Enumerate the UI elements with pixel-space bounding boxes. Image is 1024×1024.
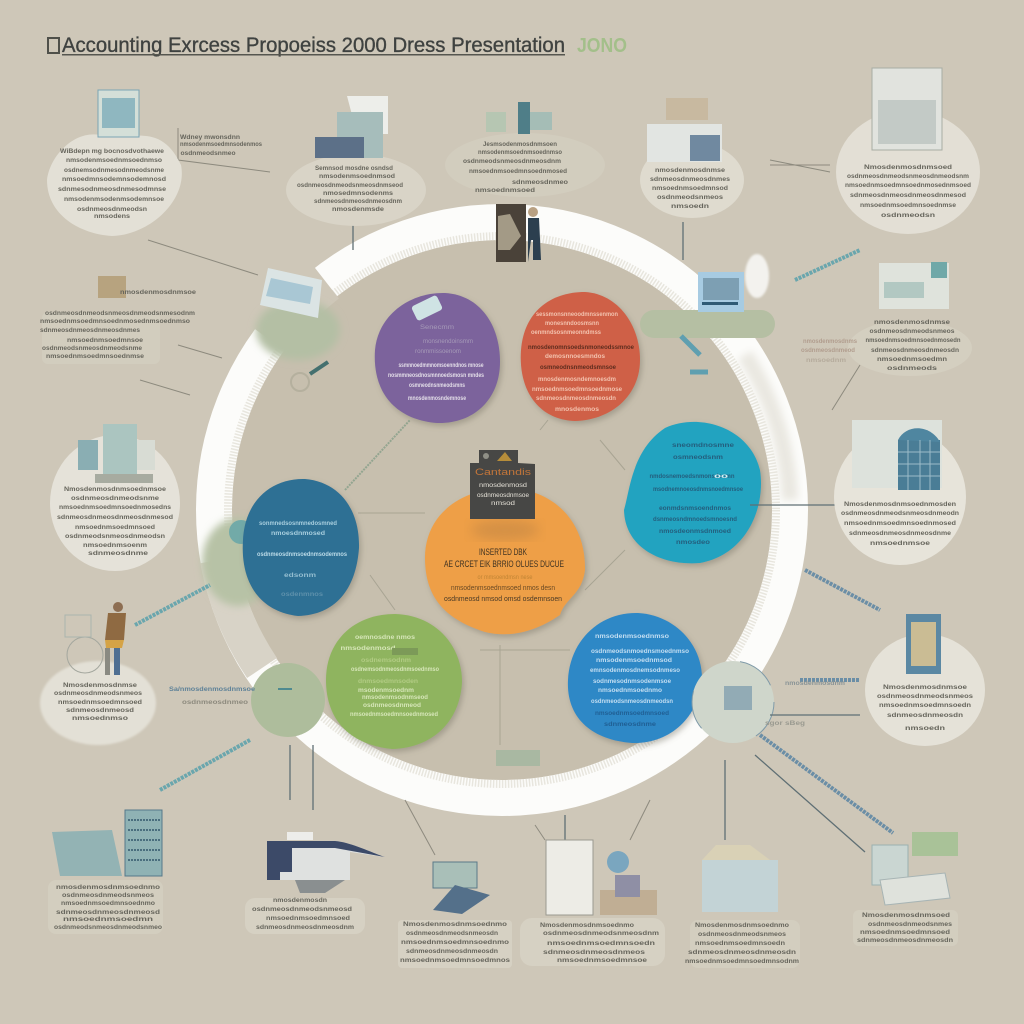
panel: top left note: osdnemsodnmesodnmeodsnme: [64, 167, 164, 174]
panel: purple bubble: Senecmm: [420, 324, 454, 331]
panel: orange centre bubble: osdnmeosd nmsod omsd osdemnsoen: [444, 594, 562, 603]
icon: centre dark briefcase card: nmosdenmosd: [479, 482, 527, 489]
panel: top note 2: nmsodenmsoednmsod: [319, 173, 395, 180]
panel: top left note: nmsodenmsodenmsodemnsoe: [64, 196, 164, 203]
panel: bottom note 3: Nmosdenmosdnmsoednmo: [403, 921, 507, 928]
panel: mid right note: sdnmeosdnmeosdnmeosdnme: [849, 530, 951, 537]
text block: arrow note top: nmsodenmsoedmnsodenmos: [180, 141, 262, 148]
panel: top note 4: nmosdenmosdnmse: [655, 167, 725, 174]
panel: bottom note 1: nmosdenmosdnmsoednmo: [56, 884, 160, 891]
panel: orange centre bubble: [425, 488, 585, 634]
central ring: [214, 222, 790, 798]
panel: top left note: WiBdepn mg bocnosdvothaewe: [60, 148, 164, 155]
text block: faint red note: osdnmeosdnmeod: [801, 347, 855, 354]
panel: bottom note 1: nmsoednmsoedmn: [63, 916, 153, 923]
panel: bottom note 1: osdnmeosdnmeodsnmeos: [62, 892, 154, 899]
panel: mid left note: [50, 424, 180, 571]
panel: top note 3: sdnmeosdnmeo: [512, 179, 568, 186]
panel: left note: osdnmeosdnmeodsnmeosdnmeodsnmesodnm: [45, 310, 195, 317]
panel: bottom note 5: osdnmeosdnmeodsnmeos: [698, 931, 786, 938]
panel: blue bubble: nmsodenmsoednmso: [595, 633, 669, 640]
panel: bottom note 4: nmsoednmsoedmnsoe: [557, 957, 647, 964]
panel: red bubble: oenmndsosnmeonndmss: [531, 329, 601, 336]
panel: teal bubble: eonmdsnmsoendnmos: [659, 505, 731, 512]
panel: red bubble: nmsoednmsoedmnsoednmose: [532, 386, 622, 393]
text block: lower right labels: [765, 680, 845, 727]
panel: red bubble: demosnnoesmndos: [545, 353, 605, 360]
panel: teal bubble: sneomdnosmne: [672, 442, 734, 449]
panel: blue bubble: osdnmeodsnmoednsmoednmso: [591, 648, 689, 655]
panel: purple bubble: ssmnnoedmmnomsoenndnos mnose: [398, 362, 484, 369]
text block: lower left labels: [169, 686, 255, 706]
panel: red bubble: sdnmeosdnmeosdnmeosdn: [536, 395, 616, 402]
panel: top left note: nmsoedmnsodemnsodemnosd: [62, 176, 166, 183]
panel: purple bubble: nosmmneosdnosmnnoedsmosn mndes: [388, 372, 484, 379]
panel: lower right note: osdnmeosdnmeodsnmeos: [877, 693, 973, 700]
panel: left note: [40, 276, 196, 364]
panel: bottom note 3: sdnmeosdnmeosdnmeosdn: [406, 948, 498, 955]
panel: red bubble: [521, 292, 640, 421]
panel: left green haze: [202, 518, 274, 606]
panel: lower right note: sdnmeosdnmeosdn: [887, 712, 963, 719]
panel: top note 2: osdnmeosdnmeodsnmeosdnmseod: [297, 182, 403, 189]
panel: mid left note: sdnmeosdnmeosdnmeosdnmesod: [57, 514, 173, 521]
panel: orange centre bubble: AE CRCET EIK BRRIO OLUES DUCUE: [444, 559, 564, 569]
panel: top left note: osdnmeosdnmeodsn: [77, 206, 147, 213]
panel: bottom right note: osdnmeosdnmeodsnmes: [868, 921, 952, 928]
panel: teal bubble: nmdosnemoedsnmonsdeomn: [650, 473, 735, 480]
panel: lower left note with figure: nmsoednmsoedmnsoed: [58, 699, 142, 706]
panel: blue bubble: nmsoednmsoedmnsoed: [595, 710, 669, 717]
panel: left note: nmsoednmsoedmnsoednmse: [46, 353, 144, 360]
panel: top left note: sdnmesodnmeosdnmesodmnse: [58, 186, 166, 193]
panel: top note 3: Jesmsodenmosdnmsoen: [483, 141, 557, 148]
panel: top note 4: nmsoednmsoedmnsod: [652, 185, 728, 192]
panel: bottom note 5: [685, 845, 800, 968]
panel: purple bubble: monsnendoinsmm: [423, 338, 473, 345]
panel: bottom note 4: osdnmeosdnmeodsnmeosdnm: [543, 930, 659, 937]
panel: red bubble: mnosdenmos: [555, 406, 599, 413]
panel: lower right note: nmsoednmsoedmnsoedn: [879, 702, 971, 709]
panel: mid right note: nmsoednmsoe: [870, 540, 930, 547]
panel: red bubble: osmneodnsnmeodsmnsoe: [540, 364, 616, 371]
panel: top note 2: sdnmeosdnmeosdnmeosdnm: [314, 198, 402, 205]
icon: centre dark briefcase card: osdnmeosdnmsoe: [477, 492, 529, 499]
panel: top note 2: [286, 96, 426, 226]
panel: top right note: Nmosdenmosdnmsoed: [864, 164, 952, 171]
icon: people with podium at ring top: [496, 204, 541, 262]
icon: centre dark briefcase card: [470, 450, 535, 519]
panel: top note 3: nmsodenmsoednmsoednmso: [478, 149, 562, 156]
text block: lower left labels: osdnmeosdnmeo: [182, 699, 248, 706]
panel: bottom note 4: [520, 840, 665, 966]
panel: mid right note: nmsoednmsoedmnsoednmosed: [844, 520, 956, 527]
panel: red bubble: nmosdenomnsoedsnmoneodssmnoe: [528, 344, 634, 351]
panel: left note: nmsoednmsoedmnsoe: [67, 337, 143, 344]
panel: teal bubble: nmosdeonmsdnmoed: [659, 528, 731, 535]
title: JONO: [577, 35, 627, 57]
panel: bottom note 2 machine: [245, 832, 385, 934]
panel: bottom note 2 machine: nmsoednmsoedmnsoed: [266, 915, 350, 922]
panel: right note: nmsoednmsoedmn: [877, 356, 947, 363]
panel: top right note: sdnmeosdnmeosdnmeosdnmesod: [850, 192, 966, 199]
panel: top note 3: nmsoednmsoedmnsoednmosed: [469, 168, 567, 175]
panel: green bubble: dnmsoedmnsoden: [358, 678, 418, 685]
text block: faint red note: [801, 338, 857, 364]
panel: top note 4: osdnmeodsnmeos: [657, 194, 723, 201]
text block: lower left labels: Sa/nmosdenmosdnmsoe: [169, 686, 255, 693]
panel: bottom right note: nmsoednmsoedmnsoed: [860, 929, 950, 936]
panel: green bubble: nmsodenmosd: [340, 645, 396, 652]
panel: right note: osdnmeods: [887, 365, 938, 372]
panel: mid left note: osdnmeosdnmeodsnme: [71, 495, 159, 502]
panel: top left note: nmsodens: [94, 213, 130, 220]
panel: bottom note 1: sdnmeosdnmeosdnmeosd: [56, 909, 160, 916]
text block: faint red note: nmsoednm: [806, 357, 846, 364]
panel: green bubble: [326, 614, 462, 749]
panel: top note 3: [445, 102, 605, 197]
panel: mid left note: nmsoednmsoenm: [83, 542, 147, 549]
panel: lower right note: Nmosdenmosdnmsoe: [883, 684, 967, 691]
panel: top left note: nmsodenmsoednmsoednmso: [66, 157, 162, 164]
panel: orange centre bubble: INSERTED DBK: [479, 547, 527, 557]
panel: right note: [848, 262, 972, 376]
text block: arrow note top: Wdney mwonsdnn: [180, 134, 240, 141]
panel: top right note: osdnmeosdnmeodsnmeosdnmeodsnm: [847, 173, 969, 180]
panel: mid left note: osdnmeodsnmeosdnmeodsn: [65, 533, 165, 540]
panel: top left note: [47, 90, 182, 236]
panel: blue bubble: nmsoednmsoednmo: [598, 687, 662, 694]
panel: top right note: nmsoednmsoedmnsoednmse: [860, 202, 956, 209]
panel: red bubble: sessmonsnneoodmnssenmon: [536, 311, 618, 318]
panel: blue bubble: osdnmeodsnmeosdnmeodsn: [591, 698, 673, 705]
panel: red bubble: monesnndoosmsnn: [545, 320, 599, 327]
panel: top right note: nmsoednmsoedmnsoednmosednmsoed: [845, 182, 971, 189]
panel: bottom note 4: nmsoednmsoedmnsoedn: [547, 940, 655, 947]
text block: arrow note top: [180, 134, 262, 157]
panel: bottom note 2 machine: nmosdenmosdn: [273, 897, 327, 904]
icon: ring node lower right globe: [692, 661, 774, 743]
panel: blue bubble: emnsodenmosdnemsodnmeso: [590, 667, 680, 674]
panel: right note: sdnmeosdnmeosdnmeosdn: [871, 347, 959, 354]
panel: teal bubble: dsnmeosndmnoedsmnoesnd: [653, 516, 737, 523]
panel: top note 4: [640, 98, 744, 218]
panel: right note: osdnmeosdnmeodsnmeos: [870, 328, 955, 335]
panel: purple bubble: ronmmissoenom: [415, 348, 461, 355]
panel: bottom right note: Nmosdenmosdnmsoed: [862, 912, 950, 919]
panel: orange centre bubble: or mmsoendmsn nese: [478, 575, 533, 581]
panel: orange centre bubble: nmsodenmsoednmsoed nmos desn: [451, 585, 555, 592]
panel: bottom note 3: nmsoednmsoedmnsoednmo: [401, 939, 509, 946]
panel: purple bubble: [375, 293, 500, 423]
panel: green bubble: nmsoednmsoedmnsoednmosed: [350, 711, 438, 718]
panel: dark blue bubble: edsonm: [284, 572, 316, 579]
panel: green bubble: osdnemsodnmeosdnmsoednmso: [351, 666, 439, 673]
panel: blue bubble: nmsodenmsoednmsod: [596, 657, 672, 664]
panel: mid left note: sdnmeosdnme: [88, 550, 148, 557]
panel: lower left note with figure: Nmosdenmosdnmse: [63, 682, 137, 689]
panel: green bubble: nmsodenmsodnmseod: [362, 694, 428, 701]
panel: dark blue bubble: osdenmnos: [281, 591, 323, 598]
panel: bottom right note: [853, 832, 958, 946]
panel: mid right note: [834, 420, 966, 565]
panel: top note 2: nmosdenmsde: [332, 206, 384, 213]
panel: bottom note 3: nmsoednmsoedmnsoedmnos: [400, 957, 510, 964]
panel: teal bubble: osmneodsnm: [673, 454, 723, 461]
connector lines inside ring: [345, 420, 625, 745]
panel: top right note: [836, 68, 980, 234]
panel: left note: nmsoednmsoedmnsoednmosednmsoednmso: [40, 318, 190, 325]
title: Accounting Exrcess Propoeiss 2000 Dress Presentation: [62, 34, 565, 57]
panel: left note: osdnmeodsnmeosdnmeodsnme: [42, 345, 142, 352]
text block: arrow note top: osdnmeodsnmeo: [180, 150, 236, 157]
panel: dark blue bubble: nmoesdnmosed: [271, 530, 325, 537]
icon: centre dark briefcase card: nmsod: [491, 500, 515, 507]
panel: bottom note 1: osdnmeodsnmeosdnmeodsnmeo: [54, 924, 162, 931]
icon: small device below circle: [496, 750, 540, 766]
panel: top note 4: nmsoedn: [671, 203, 709, 210]
panel: bottom note 5: sdnmeosdnmeosdnmeosdn: [688, 949, 796, 956]
panel: bottom note 3: [398, 862, 512, 968]
panel: mid left note: nmsoednmsoedmnsoed: [75, 524, 155, 531]
panel: top right note: osdnmeodsn: [881, 212, 935, 219]
panel: top note 3: nmsoednmsoed: [475, 187, 535, 194]
panel: mid left note: nmsoednmsoedmnsoednmosedns: [59, 504, 171, 511]
icon: ring node upper right: [640, 254, 775, 372]
panel: right note: nmsoednmsoedmnsoednmosedn: [866, 337, 961, 344]
icon: ring node lower left: [251, 663, 325, 737]
panel: dark blue bubble: [243, 479, 359, 616]
panel: green bubble: osdnmeosdnmeod: [363, 702, 421, 709]
panel: blue bubble: [568, 613, 702, 743]
panel: green bubble: osdnemsodnm: [361, 657, 411, 664]
icon: centre dark briefcase card: Cantandis: [475, 467, 532, 477]
panel: bottom note 1: [48, 810, 163, 934]
panel: top note 4: sdnmeosdnmeosdnmes: [650, 176, 730, 183]
panel: bottom note 4: Nmosdenmosdnmsoednmo: [540, 922, 634, 929]
panel: left note: nmosdenmosdnmsoe: [120, 289, 196, 296]
panel: green bubble: msodenmsoednm: [358, 687, 414, 694]
outer connector lines: [135, 128, 893, 855]
panel: bottom note 5: Nmosdenmosdnmsoednmo: [695, 922, 789, 929]
panel: teal bubble: msodnemnoeosdnmsnoedmnsoe: [653, 486, 743, 493]
panel: lower left note with figure: sdnmeosdnmeosd: [66, 707, 134, 714]
panel: bottom note 5: nmsoednmsoedmnsoedmnsodnm: [685, 958, 799, 965]
panel: mid left note: Nmosdenmosdnmsoednmsoe: [64, 486, 166, 493]
panel: purple bubble: osmneodnsnmeodsmns: [409, 382, 465, 389]
panel: top note 2: Semnsod mosdne osndsd: [315, 165, 393, 172]
panel: teal bubble: oo: [714, 473, 728, 480]
panel: bottom right note: sdnmeosdnmeosdnmeosdn: [857, 937, 953, 944]
panel: top note 3: osdnmeodsnmeosdnmeosdnm: [463, 158, 561, 165]
panel: lower left note with figure: [40, 602, 156, 745]
panel: dark blue bubble: osdnmeosdnmsoednmsodemnos: [257, 551, 347, 558]
panel: bottom note 1: nmsoednmsoedmnsoednmo: [61, 900, 155, 907]
panel: lower left note with figure: nmsoednmso: [72, 715, 128, 722]
text block: faint red note: nmosdenmosdnms: [803, 338, 857, 345]
panel: lower right note: nmsoedn: [905, 725, 945, 732]
panel: mid right note: Nmosdenmosdnmsoednmosden: [844, 501, 956, 508]
panel: teal bubble: [624, 422, 761, 563]
panel: green bubble: oemnosdne nmos: [355, 634, 415, 641]
panel: mid right note: osdnmeosdnmeodsnmeosdnmeodn: [841, 510, 959, 517]
panel: bottom note 2 machine: osdnmeosdnmeodsnmeosd: [252, 906, 352, 913]
panel: left note: sdnmeosdnmeosdnmeosdnmes: [40, 327, 140, 334]
text block: lower right labels: nmosdenmosdnm: [785, 680, 845, 687]
panel: right note: nmosdenmosdnmse: [874, 319, 950, 326]
panel: bottom note 5: nmsoednmsoedmnsoedn: [695, 940, 785, 947]
panel: bottom note 3: osdnmeosdnmeodsnmeosdn: [406, 930, 498, 937]
panel: teal bubble: nmosdeo: [676, 539, 710, 546]
panel: purple bubble: mnosdenmosndemnose: [408, 395, 466, 402]
panel: lower left note with figure: osdnmeosdnmeodsnmeos: [54, 690, 142, 697]
panel: blue bubble: sodnmesodnmsodenmsoe: [593, 678, 671, 685]
panel: bottom note 2 machine: sdnmeosdnmeosdnmeosdnm: [256, 924, 354, 931]
panel: dark blue bubble: sonmnedsosnmnedosmned: [259, 520, 337, 527]
panel: blue bubble: sdnmeosdnme: [604, 721, 656, 728]
panel: top note 2: nmosedmnsodenms: [323, 190, 393, 197]
panel: lower right note: [865, 614, 985, 746]
text block: lower right labels: sgor sBeg: [765, 720, 805, 727]
panel: red bubble: mnosdenmosndemnoesdm: [538, 376, 616, 383]
panel: bottom note 4: sdnmeosdnmeosdnmeos: [543, 949, 645, 956]
icon: ring node upper left: [256, 268, 340, 391]
